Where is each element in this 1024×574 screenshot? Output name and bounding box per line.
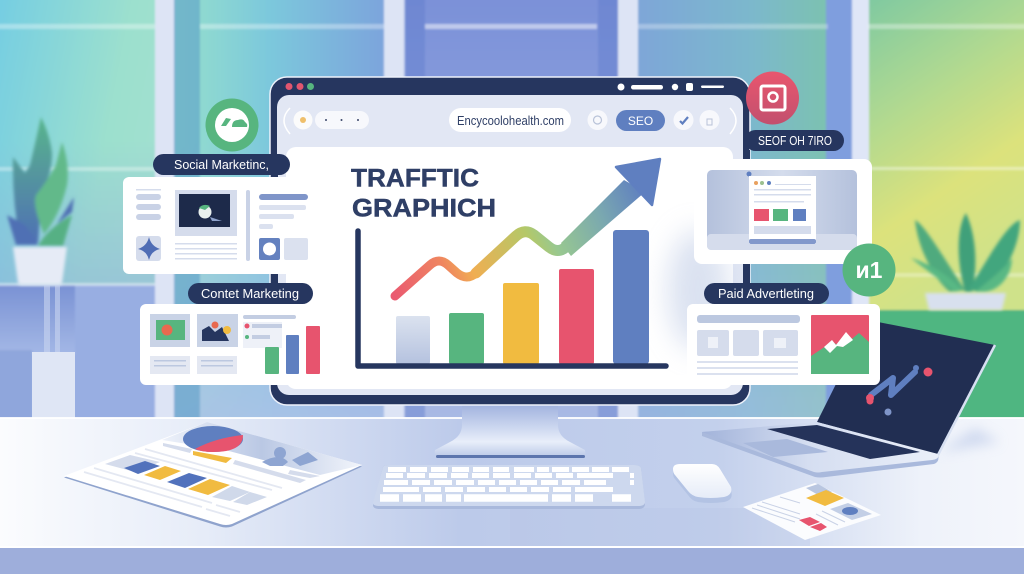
label: SEO: SEOF OH 7IRO	[758, 134, 832, 148]
video thumbnail	[175, 190, 237, 236]
shelf	[0, 285, 156, 420]
people icons	[262, 447, 318, 466]
laptop base	[702, 425, 938, 478]
icon: red camera badge	[746, 72, 799, 124]
label: social marketing: Social Marketinc,	[174, 158, 269, 172]
connectors	[271, 150, 750, 286]
image thumbnail 2	[197, 314, 238, 347]
browser toolbar: Encycoolohealth.com	[457, 113, 564, 128]
label: social marketing	[153, 154, 290, 175]
image thumbnail 1	[150, 314, 190, 347]
label: paid advertising	[704, 283, 829, 304]
icon: star tile	[136, 236, 161, 261]
keyboard	[373, 465, 645, 509]
laptop keyboard	[767, 425, 920, 459]
panel: paid advertising	[687, 304, 880, 385]
icon: circle tile	[259, 238, 280, 260]
left plant	[7, 117, 75, 418]
screen content area	[286, 147, 733, 389]
mini bars	[265, 326, 320, 374]
document bars	[124, 461, 267, 505]
window background	[0, 0, 1024, 420]
window dots	[286, 83, 314, 90]
side table	[32, 285, 75, 418]
SEO button	[616, 110, 665, 131]
label: SEO	[745, 130, 844, 151]
icon: green number badge: и1	[856, 257, 883, 283]
panel: content marketing	[140, 304, 329, 385]
plant pot	[13, 247, 67, 285]
label: content marketing: Contet Marketing	[201, 287, 299, 301]
icon: green chat badge	[206, 98, 258, 152]
small document	[743, 483, 881, 540]
haze behind chart	[330, 230, 730, 385]
label: paid advertising: Paid Advertleting	[718, 287, 814, 301]
laptop	[702, 320, 1000, 478]
browser toolbar	[284, 108, 736, 134]
chart title: TRAFFTIC	[351, 164, 479, 192]
mouse	[673, 464, 732, 503]
label: content marketing	[188, 283, 313, 304]
bar chart	[358, 230, 666, 366]
desk	[0, 417, 1024, 574]
laptop trackpad	[743, 439, 828, 457]
icon: green number badge	[842, 244, 896, 296]
right plant	[911, 213, 1020, 310]
ad image	[811, 315, 869, 374]
laptop logo	[866, 365, 932, 416]
pie chart	[183, 426, 243, 452]
chart title	[351, 164, 496, 222]
browser toolbar: SEO	[628, 114, 653, 128]
chart title: GRAPHICH	[352, 194, 496, 222]
laptop screen	[817, 320, 995, 455]
monitor stand	[435, 404, 585, 458]
keys	[380, 470, 637, 498]
monitor	[270, 77, 750, 405]
page mockup	[749, 176, 816, 244]
text blocks	[150, 356, 237, 374]
left document	[64, 422, 362, 528]
panel: SEO	[694, 159, 872, 264]
chart axes	[358, 231, 666, 366]
top bar icons	[618, 83, 724, 91]
panel: social marketing	[123, 177, 321, 274]
url pill	[449, 108, 571, 132]
trend arrow	[395, 159, 660, 296]
